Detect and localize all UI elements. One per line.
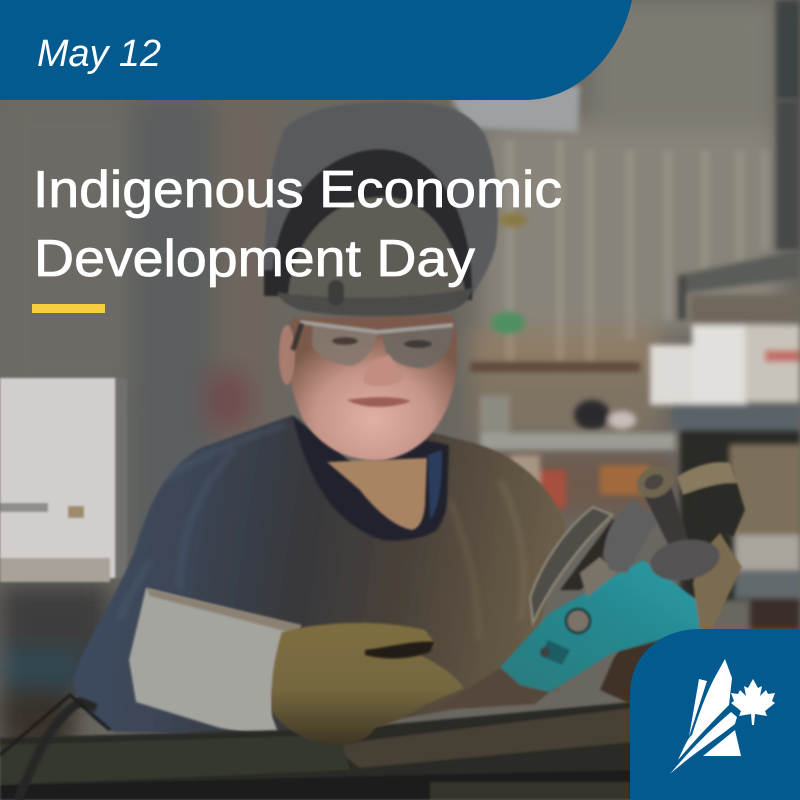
window <box>0 378 127 582</box>
title: Indigenous Economic <box>33 161 562 219</box>
right dark column <box>776 0 800 100</box>
glove hand <box>272 623 464 745</box>
accent bar <box>32 304 105 313</box>
date: May 12 <box>37 33 161 75</box>
title: Development Day <box>34 230 475 288</box>
lower hand <box>600 630 680 708</box>
overhead panel <box>450 85 580 132</box>
date banner <box>0 0 632 100</box>
shirt and arm <box>73 415 566 735</box>
dark gap behind wheel <box>560 510 640 590</box>
logo panel <box>630 629 800 800</box>
shelves and boxes <box>470 213 800 630</box>
title <box>33 161 562 288</box>
corrugated wall stripes <box>510 140 765 370</box>
neck and collar <box>293 417 449 541</box>
back wheel <box>683 470 745 537</box>
tan housing <box>693 533 742 630</box>
glasses <box>293 322 453 368</box>
glove cuff <box>129 588 300 738</box>
body <box>500 560 702 692</box>
welding helmet <box>264 102 498 316</box>
angle grinder <box>438 460 745 708</box>
icon: maple leaf <box>731 679 775 725</box>
nose <box>438 668 552 708</box>
table <box>0 702 632 800</box>
shirt folds <box>120 425 524 640</box>
face <box>288 315 457 460</box>
guard <box>580 557 617 597</box>
icon: logo blades <box>670 659 741 774</box>
ear <box>279 325 295 385</box>
side handle <box>640 477 690 552</box>
grinding wheel <box>530 507 612 623</box>
cable <box>18 702 96 800</box>
nose and mouth <box>347 355 411 407</box>
